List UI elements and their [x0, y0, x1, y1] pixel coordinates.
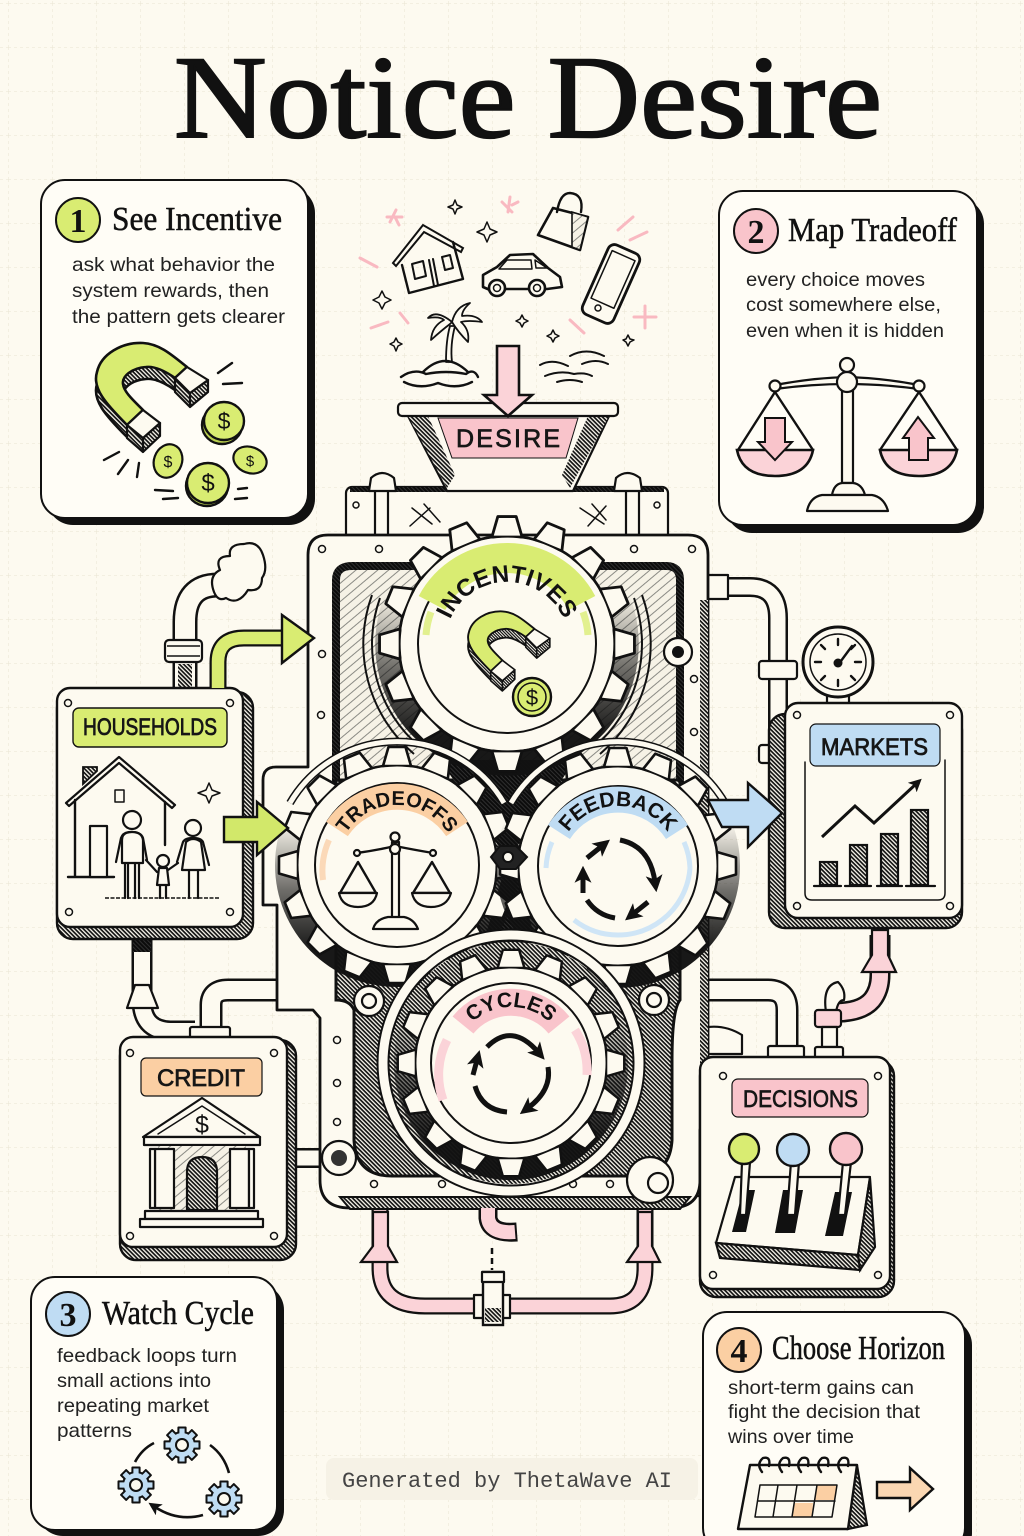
- text: map tradeoff: even when it is hidden: [746, 320, 944, 342]
- icon: coin: [513, 678, 551, 716]
- arrow: households up to machine: [218, 615, 314, 688]
- box: credit: [120, 1037, 296, 1260]
- arrow into funnel: [484, 346, 532, 416]
- flow arrows: [218, 615, 782, 855]
- panel: see incentive: [41, 180, 315, 525]
- label: desire: [438, 418, 578, 458]
- label: decisions: [732, 1079, 868, 1117]
- heading: map tradeoff: Map Tradeoff: [788, 212, 958, 249]
- text: choose horizon: wins over time: [727, 1426, 854, 1448]
- machine body: [263, 473, 708, 1209]
- box: households: [57, 688, 253, 939]
- icon: bank: [140, 1098, 263, 1227]
- upper window: [336, 566, 680, 800]
- gear: tradeoffs: [275, 746, 517, 987]
- label: households: HOUSEHOLDS: [83, 714, 217, 741]
- label: credit: [141, 1058, 262, 1096]
- text: map tradeoff: cost somewhere else,: [746, 294, 941, 316]
- icon: shopping bag: [538, 193, 588, 250]
- wish icons: [360, 193, 656, 386]
- number badge 1: 1: [70, 203, 86, 240]
- gear: feedback: FEEDBACK: [558, 791, 678, 832]
- swirl rings: [363, 595, 651, 754]
- icon: magnet: [468, 611, 550, 691]
- arrow: households to gears: [224, 802, 288, 855]
- icon: house and family: [66, 757, 220, 898]
- icon: house: [393, 225, 463, 293]
- text: watch cycle: patterns: [57, 1420, 132, 1442]
- panel: choose horizon: [703, 1312, 972, 1536]
- number badge 2: 2: [748, 214, 764, 251]
- valve: [474, 1272, 510, 1325]
- icon: bank: $: [195, 1111, 209, 1139]
- box: markets: [769, 703, 962, 928]
- text: map tradeoff: [746, 269, 944, 342]
- box: decisions: [700, 1057, 894, 1297]
- number badge 3: [46, 1292, 90, 1336]
- number badge 4: [717, 1328, 761, 1372]
- icon: magnet with coins: [96, 343, 270, 506]
- footer credit: [326, 1458, 698, 1500]
- panel: map tradeoff: [719, 191, 984, 533]
- text: see incentive: ask what behavior the: [72, 254, 275, 276]
- pink pipe to markets: [815, 930, 896, 1058]
- pink accents: [360, 197, 656, 333]
- number badge 3: 3: [60, 1297, 76, 1334]
- number badge 2: [734, 209, 778, 253]
- frame: [263, 535, 708, 1208]
- gear: incentives: [375, 515, 639, 776]
- desire hopper: [360, 193, 656, 491]
- bolts on machine: [322, 638, 692, 1203]
- steam pipe: [165, 585, 218, 690]
- text: see incentive: system rewards, then: [72, 280, 269, 302]
- number badge 1: [56, 198, 100, 242]
- right steam pipe: [706, 575, 797, 900]
- text: watch cycle: feedback loops turn: [57, 1345, 237, 1367]
- funnel: [407, 414, 610, 491]
- arrow: horizon: [877, 1468, 933, 1510]
- top cap: [346, 473, 668, 547]
- label: markets: [810, 724, 940, 766]
- pipe credit to machine: [190, 990, 285, 1038]
- bottom pink loop pipes: [361, 1208, 660, 1325]
- pipe decisions to machine: [700, 990, 804, 1058]
- icon: magnet with coins: $: [218, 408, 231, 434]
- icon: magnet with coins: $: [201, 470, 215, 497]
- label: households: [73, 708, 227, 747]
- text: map tradeoff: every choice moves: [746, 269, 925, 291]
- text: see incentive: the pattern gets clearer: [72, 306, 286, 328]
- heading: watch cycle: Watch Cycle: [102, 1295, 254, 1332]
- icon: scale with arrows: [737, 358, 957, 511]
- label: markets: MARKETS: [821, 734, 928, 761]
- pipes behind machine: [127, 575, 804, 1196]
- footer credit: Generated by ThetaWave AI: [342, 1469, 672, 1494]
- text: choose horizon: fight the decision that: [728, 1401, 921, 1423]
- icon: car: [483, 254, 562, 296]
- icon: phone: [580, 242, 642, 326]
- drain elbow: [488, 1208, 517, 1232]
- arc rings over lower gears: [290, 742, 725, 803]
- icon: cycle arrows: [473, 1036, 549, 1112]
- dark wedges between gears: [440, 760, 575, 990]
- text: see incentive: [72, 254, 286, 328]
- label: credit: CREDIT: [157, 1065, 245, 1092]
- gear: incentives: INCENTIVES: [436, 565, 576, 618]
- rivets: [318, 546, 698, 1188]
- icon: calendar: [738, 1458, 867, 1529]
- pipe households to credit: [127, 940, 195, 1031]
- icon: waves: [540, 352, 608, 382]
- chart: rising bars: [814, 784, 935, 886]
- gear: feedback: [497, 746, 740, 988]
- icon: magnet with coins: $: [164, 454, 173, 471]
- label: decisions: DECISIONS: [743, 1086, 858, 1113]
- gauge: [803, 627, 873, 705]
- text: choose horizon: [727, 1377, 921, 1448]
- ring around cycles: [383, 935, 639, 1191]
- heading: see incentive: See Incentive: [112, 201, 282, 238]
- gear: cycles: CYCLES: [466, 992, 556, 1020]
- hex bolt between gears: [491, 846, 527, 869]
- number badge 4: 4: [730, 1333, 748, 1370]
- text: watch cycle: repeating market: [57, 1395, 210, 1417]
- lower window: [336, 780, 680, 1176]
- icon: feedback arrows: [583, 840, 655, 918]
- steam cloud: [212, 543, 265, 601]
- sparkles: [373, 200, 634, 351]
- icon: magnet with coins: $: [246, 453, 255, 470]
- heading: choose horizon: Choose Horizon: [772, 1330, 945, 1367]
- arrow: gears to markets: [708, 783, 782, 847]
- icon: levers: [716, 1133, 875, 1270]
- icon: three gears cycle: [118, 1428, 242, 1517]
- title: Notice Desire: [174, 32, 882, 163]
- gear: tradeoffs: TRADEOFFS: [334, 791, 458, 832]
- text: watch cycle: small actions into: [57, 1370, 211, 1392]
- label: desire: DESIRE: [456, 425, 560, 453]
- text: watch cycle: [57, 1345, 237, 1442]
- icon: scale: [339, 832, 451, 929]
- gear: cycles: [394, 942, 628, 1184]
- icon: palm island: [401, 303, 482, 386]
- icon: coin: $: [526, 685, 538, 710]
- text: choose horizon: short-term gains can: [728, 1377, 914, 1399]
- panel: watch cycle: [31, 1277, 284, 1536]
